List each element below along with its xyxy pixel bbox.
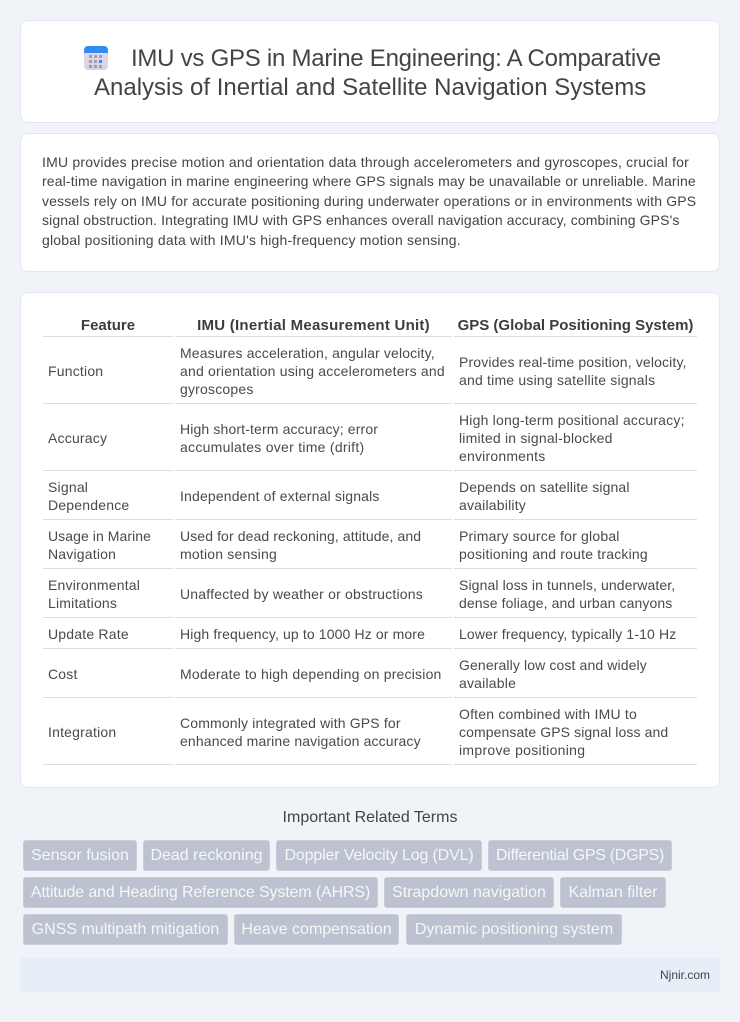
row: Update Rate: Lower frequency, typically 1-10 Hz <box>459 626 676 642</box>
row: Function: Provides real-time position, velocity, <box>459 354 687 370</box>
text block: intro <box>42 154 696 248</box>
row: Integration: compensate GPS signal loss and <box>459 724 668 740</box>
row: Cost: Moderate to high depending on precision <box>180 666 442 682</box>
row: Usage in Marine Navigation: Used for dead reckoning, attitude, and <box>180 528 421 544</box>
tags: related terms: Doppler Velocity Log (DVL) <box>284 847 474 864</box>
table header <box>81 317 693 334</box>
row: Function: and time using satellite signals <box>459 372 655 388</box>
text block: intro: real-time navigation in marine engineering where GPS signals may be unavailable or unreliable. Marine <box>42 173 696 189</box>
row: Usage in Marine Navigation: Usage in Marine <box>48 528 151 544</box>
title: Analysis of Inertial and Satellite Navigation Systems <box>94 74 646 101</box>
row: Accuracy: Accuracy <box>48 430 107 446</box>
row: Integration: improve positioning <box>459 742 585 758</box>
row: Cost <box>48 657 647 691</box>
row: Signal Dependence: Dependence <box>48 497 129 513</box>
tags: related terms: Differential GPS (DGPS) <box>496 847 664 864</box>
panel: title card <box>20 20 720 123</box>
panel: comparison table <box>20 292 720 788</box>
title: IMU vs GPS in Marine Engineering: A Comparative <box>131 45 661 72</box>
row: Accuracy: High short-term accuracy; error <box>180 421 378 437</box>
panel: intro text <box>20 133 720 272</box>
row: Signal Dependence: Signal <box>48 479 88 495</box>
footer text: Njnir.com <box>660 968 710 982</box>
row: Accuracy: environments <box>459 448 545 464</box>
row: Environmental Limitations: dense foliage, and urban canyons <box>459 595 672 611</box>
text block: intro: vessels rely on IMU for accurate positioning during underwater operations or in environments with GPS <box>42 193 696 209</box>
row: Usage in Marine Navigation <box>48 528 648 562</box>
tags: related terms: Heave compensation <box>241 921 392 938</box>
row: Accuracy: accumulates over time (drift) <box>180 439 364 455</box>
footer <box>20 958 720 992</box>
tags: related terms: GNSS multipath mitigation <box>32 921 219 938</box>
tags: related terms: Dynamic positioning system <box>415 921 613 938</box>
row: Integration <box>48 706 668 758</box>
row: Integration: Often combined with IMU to <box>459 706 637 722</box>
row: Function: and orientation using accelerometers and <box>180 363 445 379</box>
tags: related terms <box>23 840 672 945</box>
row: Usage in Marine Navigation: Primary source for global <box>459 528 620 544</box>
row: Update Rate: Update Rate <box>48 626 129 642</box>
row: Environmental Limitations: Unaffected by weather or obstructions <box>180 586 423 602</box>
row: Function <box>48 345 687 397</box>
table header: GPS (Global Positioning System) <box>458 317 693 334</box>
text block: intro: global positioning data with IMU's high-frequency motion sensing. <box>42 232 461 248</box>
row: Environmental Limitations: Limitations <box>48 595 117 611</box>
heading: related terms: Important Related Terms <box>283 809 457 826</box>
row: Accuracy: High long-term positional accuracy; <box>459 412 685 428</box>
row: Usage in Marine Navigation: Navigation <box>48 546 116 562</box>
text block: intro: IMU provides precise motion and orientation data through accelerometers and gyroscopes, crucial for <box>42 154 689 170</box>
row: Signal Dependence: Depends on satellite signal <box>459 479 630 495</box>
row: Usage in Marine Navigation: positioning and route tracking <box>459 546 648 562</box>
table header: Feature <box>81 317 135 334</box>
text block: intro: signal obstruction. Integrating IMU with GPS enhances overall navigation accuracy, combining GPS's <box>42 212 680 228</box>
row: Signal Dependence <box>48 479 630 513</box>
row: Cost: available <box>459 675 516 691</box>
row: Integration: Integration <box>48 724 116 740</box>
row: Environmental Limitations <box>48 577 675 611</box>
row: Function: Function <box>48 363 103 379</box>
row: Environmental Limitations: Environmental <box>48 577 140 593</box>
row: Accuracy <box>48 412 685 464</box>
tags: related terms: Attitude and Heading Reference System (AHRS) <box>31 884 370 901</box>
row: Integration: Commonly integrated with GPS for <box>180 715 401 731</box>
tags: related terms: Strapdown navigation <box>392 884 546 901</box>
icon: calendar <box>84 46 108 70</box>
row: Signal Dependence: Independent of external signals <box>180 488 380 504</box>
tags: related terms: Dead reckoning <box>150 847 263 864</box>
row: Signal Dependence: availability <box>459 497 526 513</box>
row: Cost: Cost <box>48 666 78 682</box>
row: Function: Measures acceleration, angular velocity, <box>180 345 435 361</box>
table header: IMU (Inertial Measurement Unit) <box>197 317 430 334</box>
row: Environmental Limitations: Signal loss in tunnels, underwater, <box>459 577 675 593</box>
row: Function: gyroscopes <box>180 381 254 397</box>
tags: related terms: Sensor fusion <box>31 847 129 864</box>
row: Update Rate: High frequency, up to 1000 Hz or more <box>180 626 425 642</box>
row: Cost: Generally low cost and widely <box>459 657 647 673</box>
title <box>94 45 661 101</box>
row: Integration: enhanced marine navigation accuracy <box>180 733 421 749</box>
row: Accuracy: limited in signal-blocked <box>459 430 613 446</box>
row: Usage in Marine Navigation: motion sensing <box>180 546 277 562</box>
tags: related terms: Kalman filter <box>569 884 657 901</box>
row: Update Rate <box>48 626 676 642</box>
